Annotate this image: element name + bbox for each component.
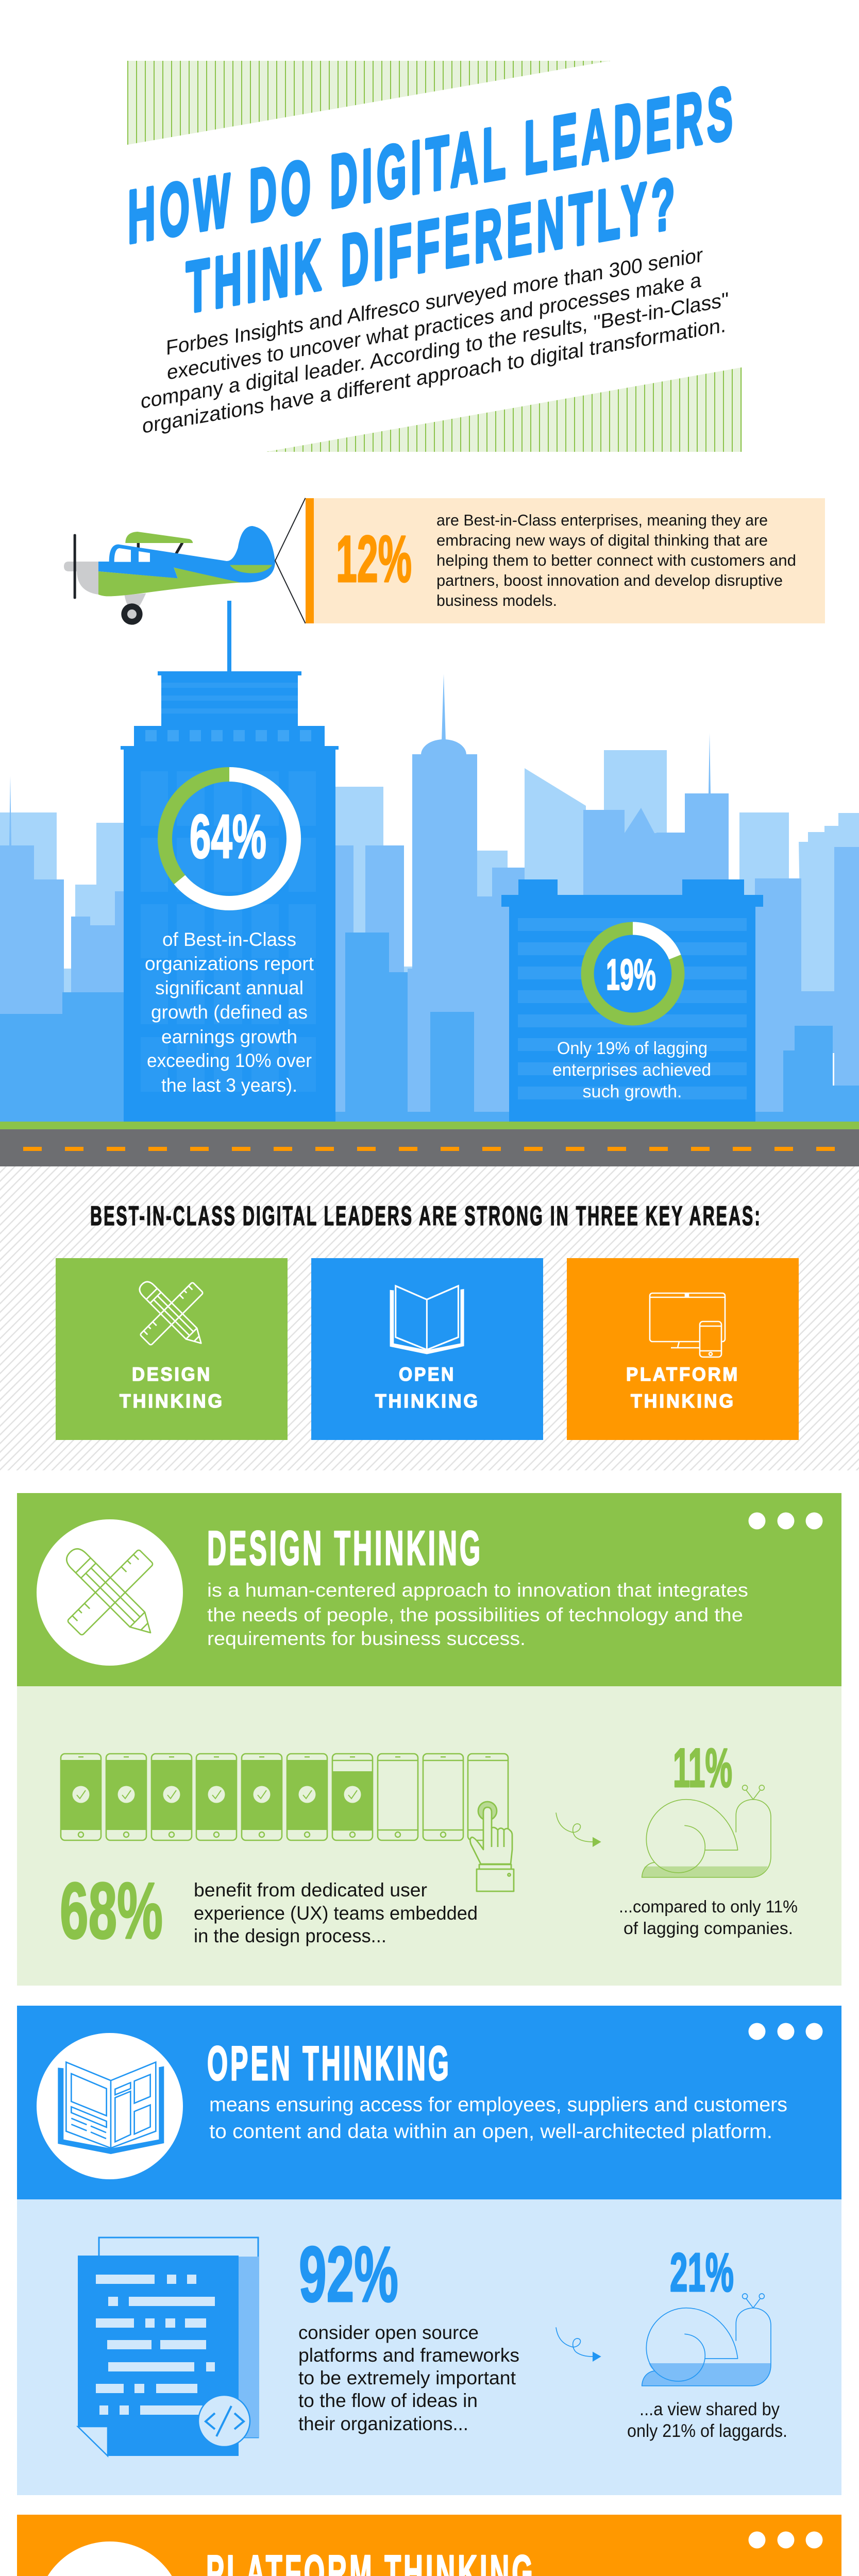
panel: design thinking stats: 11%	[673, 1737, 732, 1799]
panel: design thinking stats: experience (UX) teams embedded	[194, 1903, 478, 1924]
building: lagging 19 percent: such growth.	[582, 1082, 682, 1101]
intro text	[141, 243, 729, 438]
intro text: company a digital leader. According to the results, "Best-in-Class"	[141, 288, 729, 413]
three dots	[748, 1513, 822, 1529]
panel: design thinking header: requirements for business success.	[207, 1628, 526, 1649]
panel: open thinking header: OPEN THINKING	[207, 2036, 451, 2090]
three dots	[748, 2532, 822, 2548]
panel: design thinking header	[17, 1493, 841, 1686]
panel: design thinking stats: 68%	[60, 1866, 163, 1955]
building: Best-in-Class 64 percent: 64%	[190, 802, 266, 871]
building: lagging 19 percent: Only 19% of lagging	[557, 1039, 708, 1058]
building: lagging 19 percent: 19%	[606, 951, 656, 999]
three dots	[748, 2023, 822, 2040]
panel: design thinking header: is a human-centered approach to innovation that integrates	[207, 1580, 748, 1601]
icon: blue snail	[642, 2294, 771, 2386]
card: platform thinking	[567, 1258, 799, 1440]
panel: open thinking stats: 21%	[670, 2242, 734, 2303]
card: design thinking	[56, 1258, 288, 1440]
panel: open thinking stats: to the flow of ideas in	[298, 2390, 478, 2411]
panel: open thinking stats: consider open source	[298, 2322, 479, 2343]
card: design thinking: THINKING	[120, 1391, 224, 1412]
intro text: organizations have a different approach to digital transformation.	[142, 313, 726, 438]
panel: design thinking stats: of lagging companies.	[624, 1919, 793, 1938]
callout: 12 percent: partners, boost innovation and develop disruptive	[436, 571, 783, 589]
panel: open thinking stats: ...a view shared by	[639, 2399, 780, 2419]
building: lagging 19 percent: enterprises achieved	[552, 1060, 711, 1080]
panel: open thinking header	[17, 2006, 841, 2199]
panel: design thinking stats: ...compared to only 11%	[619, 1897, 798, 1916]
panel: open thinking header: to content and data within an open, well-architected platform.	[209, 2121, 772, 2143]
road	[0, 1122, 859, 1166]
hatched band: three key areas	[0, 1166, 859, 1470]
callout: 12 percent: helping them to better connect with customers and	[436, 551, 796, 569]
icon: magazine in circle	[37, 2033, 183, 2179]
panel: open thinking stats: only 21% of laggards.	[627, 2421, 787, 2441]
card: open thinking: OPEN	[399, 1364, 456, 1385]
skyline background	[0, 674, 859, 1122]
airplane	[64, 498, 306, 625]
icon: code document	[78, 2238, 259, 2456]
panel: open thinking stats: platforms and frameworks	[298, 2345, 519, 2366]
callout: 12 percent: business models.	[436, 591, 557, 609]
icon: devices in circle	[37, 2541, 183, 2576]
panel: open thinking stats: their organizations...	[298, 2413, 468, 2434]
icon: monitor and phone	[650, 1293, 725, 1357]
card: platform thinking: PLATFORM	[626, 1364, 739, 1385]
building: Best-in-Class 64 percent: of Best-in-Class	[162, 929, 296, 950]
panel: design thinking header: the needs of people, the possibilities of technology and the	[207, 1604, 743, 1625]
callout: 12 percent: 12%	[336, 522, 412, 596]
panel: open thinking header: means ensuring access for employees, suppliers and customers	[209, 2094, 787, 2116]
donut: 19 percent	[587, 928, 678, 1019]
panel: open thinking stats: to be extremely important	[298, 2367, 516, 2388]
callout: 12 percent: are Best-in-Class enterprises, meaning they are	[436, 511, 768, 529]
building: Best-in-Class 64 percent: organizations report	[145, 953, 314, 974]
building: Best-in-Class 64 percent	[121, 601, 339, 1122]
panel: open thinking stats: 92%	[299, 2230, 398, 2318]
panel: design thinking stats: benefit from dedicated user	[194, 1879, 427, 1901]
intro text: executives to uncover what practices and processes make a	[167, 268, 702, 384]
decorative stripes: bottom	[266, 367, 742, 452]
building: Best-in-Class 64 percent: earnings growth	[161, 1026, 297, 1047]
card: design thinking: DESIGN	[132, 1364, 212, 1385]
decorative stripes: top	[127, 61, 611, 145]
icon: open book	[390, 1286, 464, 1354]
building: Best-in-Class 64 percent: significant annual	[155, 977, 304, 998]
icon: tapping hand	[470, 1802, 514, 1891]
building: lagging 19 percent	[501, 879, 763, 1122]
panel: design thinking stats: in the design process...	[194, 1925, 386, 1946]
panel: design thinking header: DESIGN THINKING	[207, 1521, 483, 1575]
card: platform thinking: THINKING	[631, 1391, 735, 1412]
building: Best-in-Class 64 percent: the last 3 years).	[161, 1075, 297, 1096]
panel: open thinking stats	[17, 2199, 841, 2495]
card: open thinking: THINKING	[375, 1391, 480, 1412]
building: Best-in-Class 64 percent: growth (defined as	[151, 1002, 308, 1023]
donut: 64 percent	[165, 774, 294, 903]
icon: pencil and ruler	[137, 1279, 207, 1349]
card: open thinking	[311, 1258, 543, 1440]
arrow	[556, 1812, 601, 1847]
building: Best-in-Class 64 percent: exceeding 10% over	[147, 1050, 312, 1071]
callout: 12 percent	[306, 498, 825, 623]
phones row	[61, 1754, 508, 1840]
callout: 12 percent: embracing new ways of digital thinking that are	[436, 531, 768, 549]
intro text: Forbes Insights and Alfresco surveyed more than 300 senior	[166, 243, 703, 360]
icon: pencil and ruler in circle	[37, 1519, 183, 1666]
icon: green snail	[642, 1785, 771, 1877]
panel: platform thinking header	[17, 2515, 841, 2576]
panel: design thinking stats	[17, 1686, 841, 1986]
arrow	[556, 2327, 601, 2362]
